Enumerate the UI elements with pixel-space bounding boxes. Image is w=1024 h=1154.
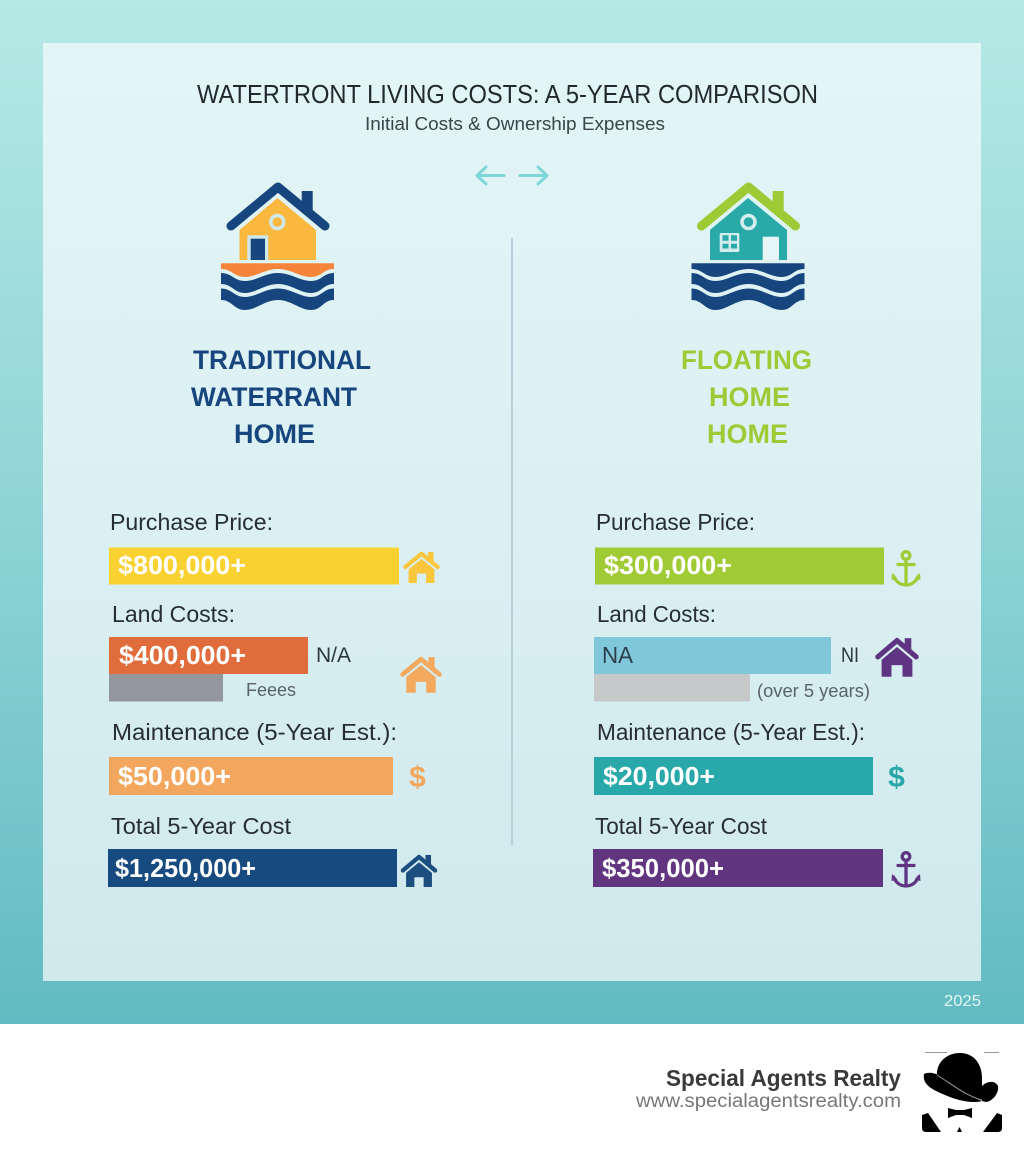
icon: floating home	[692, 187, 804, 310]
maintenance label: Maintenance (5-Year Est.):	[597, 719, 865, 745]
note: fees: Feees	[246, 680, 296, 700]
footer brand name: Special Agents Realty	[666, 1065, 901, 1091]
bar: fees	[594, 674, 750, 702]
maintenance label: Maintenance (5-Year Est.):	[112, 719, 397, 745]
year label: 2025	[944, 993, 981, 1010]
icon: house navy	[403, 855, 435, 887]
icon: dollar orange: $	[409, 761, 426, 794]
bar: fees	[109, 674, 223, 702]
heading: floating home: FLOATING	[681, 345, 812, 375]
icon: anchor green	[892, 552, 920, 585]
heading: traditional waterfront home: TRADITIONAL	[193, 345, 371, 375]
note: over 5 years: (over 5 years)	[757, 681, 870, 701]
icon: anchor purple	[892, 853, 920, 886]
icon: dollar teal: $	[888, 761, 905, 794]
note: N/A: N/A	[316, 644, 351, 667]
icon: comparison arrows	[477, 167, 547, 184]
heading: traditional waterfront home	[191, 345, 371, 449]
footer band	[0, 1024, 1024, 1154]
bar: total: $1,250,000+	[115, 853, 256, 883]
heading: floating home: HOME	[707, 419, 788, 449]
heading: traditional waterfront home: HOME	[234, 419, 315, 449]
title: WATERTRONT LIVING COSTS: A 5-YEAR COMPARISON	[197, 79, 818, 109]
panel: floating home costs	[593, 509, 920, 887]
center divider	[511, 238, 513, 845]
land costs label: Land Costs:	[597, 601, 716, 627]
land costs label: Land Costs:	[112, 601, 235, 627]
bar: maintenance	[594, 757, 873, 795]
bar: land costs	[109, 637, 308, 674]
panel: main content card	[43, 43, 981, 981]
note: NI: NI	[841, 644, 859, 667]
bar: total	[108, 849, 397, 887]
icon: traditional waterfront house	[221, 187, 334, 310]
purchase price label: Purchase Price:	[596, 509, 755, 535]
subtitle: Initial Costs & Ownership Expenses	[365, 114, 665, 134]
panel: traditional home costs	[108, 509, 439, 887]
bar: land costs	[594, 637, 831, 674]
icon: house purple	[878, 638, 916, 677]
icon: house yellow	[405, 552, 438, 583]
bar: maintenance	[109, 757, 393, 795]
bar: purchase price: $800,000+	[118, 550, 246, 580]
bar: land costs: NA	[602, 642, 634, 668]
bar: purchase price	[109, 548, 399, 584]
bar: maintenance: $50,000+	[118, 761, 231, 791]
purchase price label: Purchase Price:	[110, 509, 273, 535]
bar: purchase price: $300,000+	[604, 550, 732, 580]
total label: Total 5-Year Cost	[111, 813, 292, 839]
bar: land costs: $400,000+	[119, 640, 246, 670]
bar: total: $350,000+	[602, 853, 724, 883]
heading: traditional waterfront home: WATERRANT	[191, 382, 357, 412]
total label: Total 5-Year Cost	[595, 813, 768, 839]
bar: total	[593, 849, 883, 887]
heading: floating home	[681, 345, 812, 449]
bar: purchase price	[595, 548, 884, 584]
bar: maintenance: $20,000+	[603, 761, 715, 791]
logo: bowler hat agent	[922, 1052, 1002, 1132]
footer url: www.specialagentsrealty.com	[635, 1091, 901, 1112]
heading: floating home: HOME	[709, 382, 790, 412]
icon: house orange	[403, 657, 439, 693]
